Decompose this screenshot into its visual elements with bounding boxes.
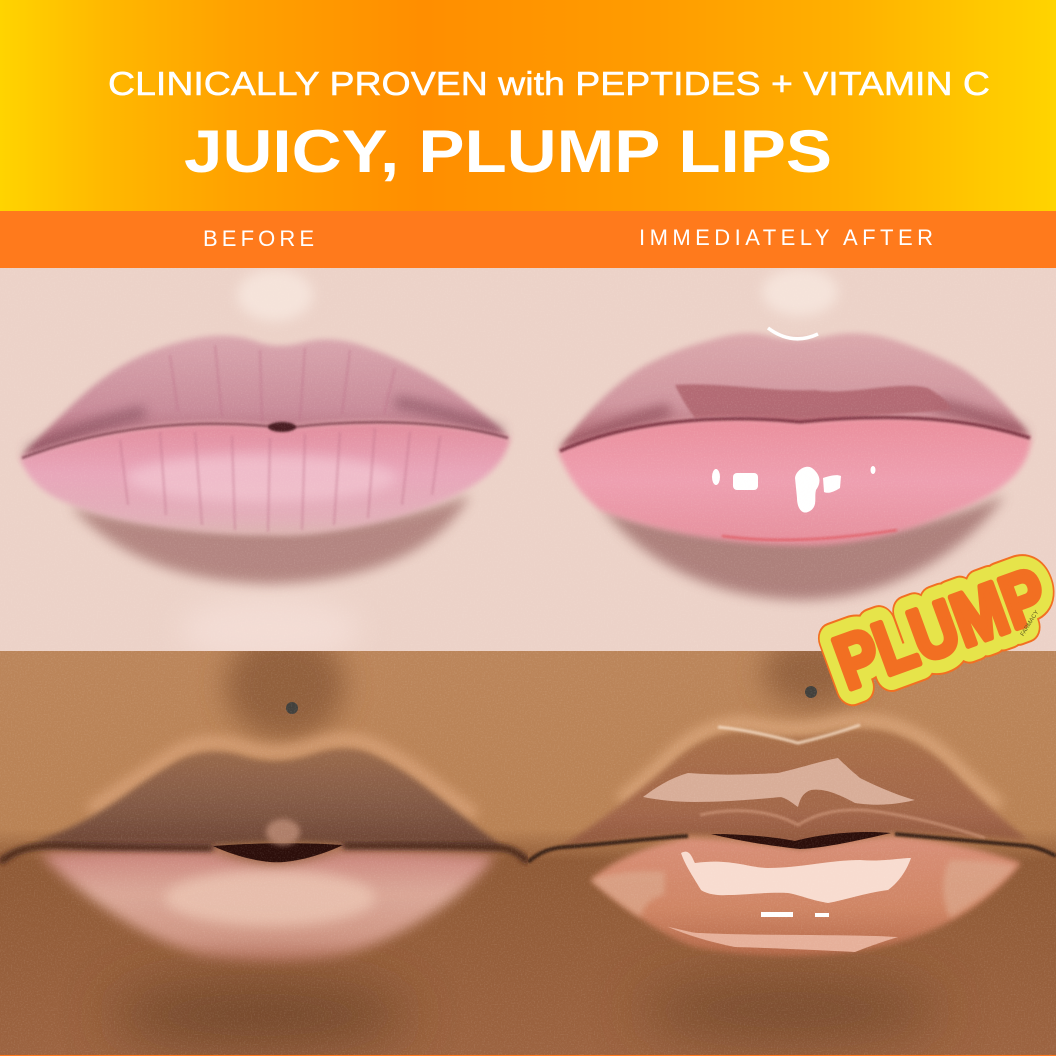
sticker small brand: FARMACY — [1020, 610, 1040, 638]
lower lip gloss — [681, 852, 911, 903]
upper lip — [33, 749, 503, 847]
mouth line — [22, 422, 508, 458]
label: immediately after: IMMEDIATELY AFTER — [639, 225, 933, 250]
photo: light skin after — [528, 268, 1056, 651]
lower lip highlight — [165, 870, 375, 926]
skin grain — [0, 268, 1056, 1055]
upper lip gloss — [643, 758, 915, 807]
subtitle: clinically proven: CLINICALLY PROVEN with PEPTIDES + VITAMIN C — [108, 65, 990, 102]
lower lip highlight — [127, 454, 397, 502]
lower lip — [20, 422, 510, 536]
chin shadow — [110, 983, 410, 1047]
lip tubercle — [266, 819, 300, 845]
title: JUICY, PLUMP LIPS — [184, 118, 832, 185]
lower lip — [40, 849, 495, 961]
bottom edge line — [0, 1055, 1056, 1056]
mouth line — [560, 417, 1030, 451]
lip surround highlight — [90, 740, 475, 816]
upper lip glossy edge — [718, 725, 860, 743]
lower lip — [558, 417, 1031, 545]
mouth opening — [268, 422, 296, 432]
header banner — [0, 0, 1056, 211]
mouth line — [528, 834, 1056, 862]
upper lip lower ridge — [700, 810, 985, 838]
lip shadow — [600, 495, 1005, 600]
photo: deep skin after — [528, 636, 1056, 1055]
corner shading — [28, 402, 502, 454]
photo: deep skin before — [0, 630, 528, 1055]
mole — [286, 702, 298, 714]
upper lip — [20, 336, 510, 458]
label: before: BEFORE — [203, 226, 314, 251]
mouth line — [0, 846, 528, 862]
lip edge red — [722, 530, 897, 540]
lip shadow — [70, 495, 470, 584]
photo: light skin before — [0, 268, 528, 664]
philtrum shadow — [754, 651, 849, 716]
mouth opening — [213, 843, 343, 862]
mole — [805, 686, 817, 698]
upper lip gloss flap — [675, 384, 951, 422]
lip gloss highlights — [712, 328, 876, 513]
lip surround highlight — [620, 721, 1000, 806]
philtrum shadow — [225, 630, 345, 740]
upper lip — [558, 333, 1031, 451]
corner shading — [566, 404, 1024, 450]
upper lip — [561, 730, 1028, 849]
mouth opening — [711, 832, 891, 849]
lower lip gloss small — [761, 912, 829, 917]
lower lip — [591, 836, 1021, 956]
lower lip gloss bottom — [668, 927, 898, 952]
lower lip side sheen — [591, 860, 1015, 918]
lip creases — [120, 345, 440, 532]
chin shadow — [640, 980, 940, 1040]
orange label bar — [0, 211, 1056, 268]
